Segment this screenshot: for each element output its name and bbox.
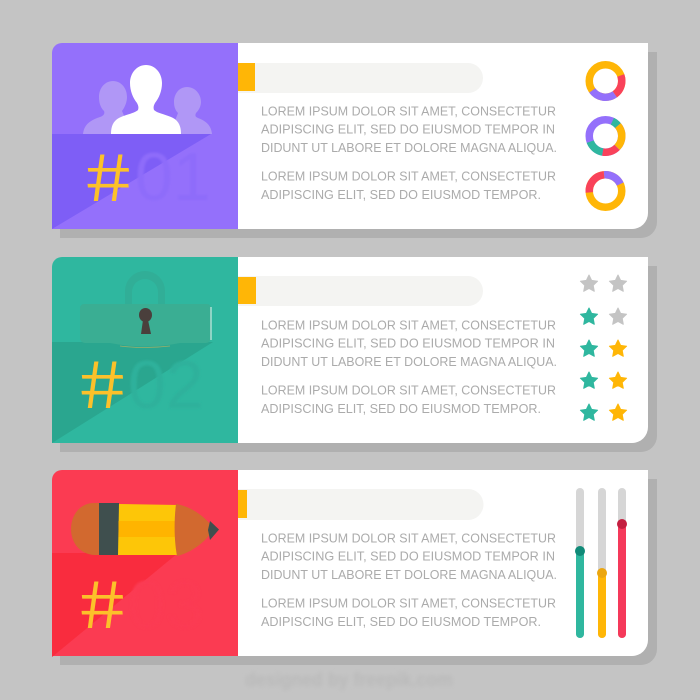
white card xyxy=(238,257,648,443)
text block: LOREM IPSUM DOLOR SIT AMET, CONSECTETUR xyxy=(261,168,556,184)
darker diagonal band xyxy=(52,342,213,443)
panel: banner 2 xyxy=(52,257,657,452)
text block: LOREM IPSUM DOLOR SIT AMET, CONSECTETUR xyxy=(261,596,556,610)
watermark: designed by freepik.com xyxy=(245,670,453,691)
title bar xyxy=(238,276,483,306)
donut chart 1 xyxy=(583,58,628,104)
text block: LOREM IPSUM DOLOR SIT AMET, CONSECTETUR xyxy=(261,530,556,546)
hash symbol: # xyxy=(83,140,134,216)
darker diagonal band xyxy=(52,553,178,657)
coloured side panel xyxy=(52,257,238,443)
white card xyxy=(238,470,648,656)
text block: ADIPISCING ELIT, SED DO EIUSMOD TEMPOR. xyxy=(261,614,541,629)
text block: ADIPISCING ELIT, SED DO EIUSMOD TEMPOR. xyxy=(261,187,541,202)
text block: ADIPISCING ELIT, SED DO EIUSMOD TEMPOR. xyxy=(261,401,541,416)
darker diagonal band xyxy=(52,134,211,229)
star ratings xyxy=(580,275,627,420)
text block xyxy=(261,530,557,629)
hash symbol: # xyxy=(77,347,128,423)
title bar xyxy=(238,489,484,520)
text block: ADIPISCING ELIT, SED DO EIUSMOD TEMPOR IN xyxy=(261,548,555,564)
title tab xyxy=(238,490,247,518)
icon: pencil xyxy=(71,503,219,556)
text block: ADIPISCING ELIT, SED DO EIUSMOD TEMPOR IN xyxy=(261,122,555,136)
text block: DIDUNT UT LABORE ET DOLORE MAGNA ALIQUA. xyxy=(261,140,557,155)
slider chart xyxy=(575,488,627,638)
text block: ADIPISCING ELIT, SED DO EIUSMOD TEMPOR IN xyxy=(261,336,555,350)
text block: LOREM IPSUM DOLOR SIT AMET, CONSECTETUR xyxy=(261,104,556,118)
number 02: 02 xyxy=(128,347,204,423)
panel: banner 3 xyxy=(52,470,657,665)
text block xyxy=(261,104,557,202)
coloured side panel xyxy=(52,470,238,656)
text block xyxy=(261,318,557,416)
number 03: 03 xyxy=(128,567,204,643)
text block: LOREM IPSUM DOLOR SIT AMET, CONSECTETUR xyxy=(261,382,556,398)
title tab xyxy=(238,63,255,91)
white card xyxy=(238,43,648,229)
hash symbol: # xyxy=(77,567,128,643)
text block: LOREM IPSUM DOLOR SIT AMET, CONSECTETUR xyxy=(261,318,556,332)
card shadow xyxy=(60,52,657,238)
donut chart 2 xyxy=(583,113,628,159)
icon: padlock xyxy=(80,271,212,348)
number 01: 01 xyxy=(135,139,211,215)
panel: banner 1 xyxy=(52,43,657,238)
icon: group of people xyxy=(83,65,212,134)
donut chart 3 xyxy=(588,173,623,209)
card shadow xyxy=(60,479,657,665)
text block: DIDUNT UT LABORE ET DOLORE MAGNA ALIQUA. xyxy=(261,354,557,369)
text block: DIDUNT UT LABORE ET DOLORE MAGNA ALIQUA. xyxy=(261,567,557,582)
title tab xyxy=(238,277,256,304)
coloured side panel xyxy=(52,43,238,229)
title bar xyxy=(238,63,483,93)
card shadow xyxy=(60,266,657,452)
